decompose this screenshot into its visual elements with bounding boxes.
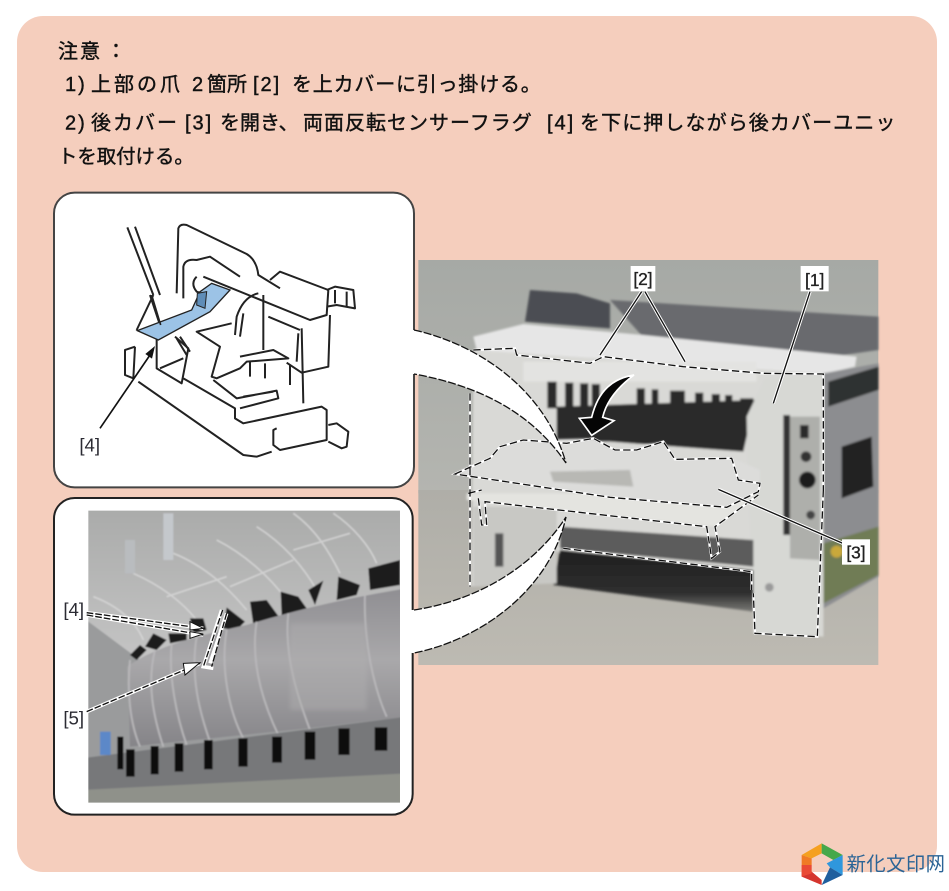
icon: hexagon cube xyxy=(802,843,843,885)
label: [4]: [4] xyxy=(79,435,100,456)
step 2 line 1: 2) xyxy=(65,112,87,134)
dashed outlines: unit contours xyxy=(455,348,823,637)
label: [4]: [4] xyxy=(63,599,84,620)
heading: note: ： xyxy=(106,41,126,63)
photo: printer rear with cover xyxy=(418,260,878,665)
step 2 line 1: [3] xyxy=(185,112,213,134)
line art: flag assembly xyxy=(125,225,355,457)
printer body xyxy=(472,290,878,637)
inset panel: line drawing of sensor flag xyxy=(54,193,414,487)
sensor flag highlight xyxy=(137,283,230,340)
heading: note: 注意 xyxy=(58,40,102,63)
inset frame xyxy=(54,498,413,815)
step 1: 上部の爪 xyxy=(91,73,183,96)
arrow: part 4 leader xyxy=(100,346,155,428)
leader lines: parts 1 2 3 xyxy=(600,292,847,545)
step 2 line 1: [4] xyxy=(547,112,575,134)
callout wedge: lower xyxy=(408,517,566,653)
flap: opened rear cover xyxy=(455,438,760,527)
callout wedge: upper xyxy=(408,330,566,463)
label: [3] xyxy=(842,539,870,565)
text block: caution instructions xyxy=(58,40,896,168)
step 2 line 2: トを取付ける。 xyxy=(58,146,194,168)
watermark logo: 新化文印网 xyxy=(802,843,945,885)
step 1: 2 xyxy=(192,74,203,96)
step 2 line 1: 後カバー xyxy=(91,112,179,134)
step 2 line 1: を開き、 xyxy=(220,112,299,134)
step 2 line 1: を下に押しながら後カバーユニッ xyxy=(580,112,896,134)
label: [1]: [1] xyxy=(805,270,824,290)
wordmark: 新化文印网 xyxy=(847,854,945,876)
arrow: cover closing direction xyxy=(579,375,634,435)
close-up photo scene xyxy=(88,510,400,803)
label: [5]: [5] xyxy=(63,707,84,728)
label: [2]: [2] xyxy=(633,269,653,289)
step 1: を上カバーに引っ掛ける。 xyxy=(292,73,542,96)
step 1: 1) xyxy=(65,74,87,96)
label: [1] xyxy=(801,266,829,291)
label: [3]: [3] xyxy=(846,543,866,563)
step 2 line 1: 両面反転センサーフラグ xyxy=(303,112,533,134)
photo background xyxy=(418,260,878,665)
arrows: part 4 and 5 leaders xyxy=(87,610,227,712)
step 1: 箇所 xyxy=(207,73,247,96)
step 1: [2] xyxy=(253,74,281,96)
inset frame xyxy=(54,193,414,487)
label: [2] xyxy=(631,266,655,291)
inset panel: close-up photo xyxy=(54,498,413,815)
